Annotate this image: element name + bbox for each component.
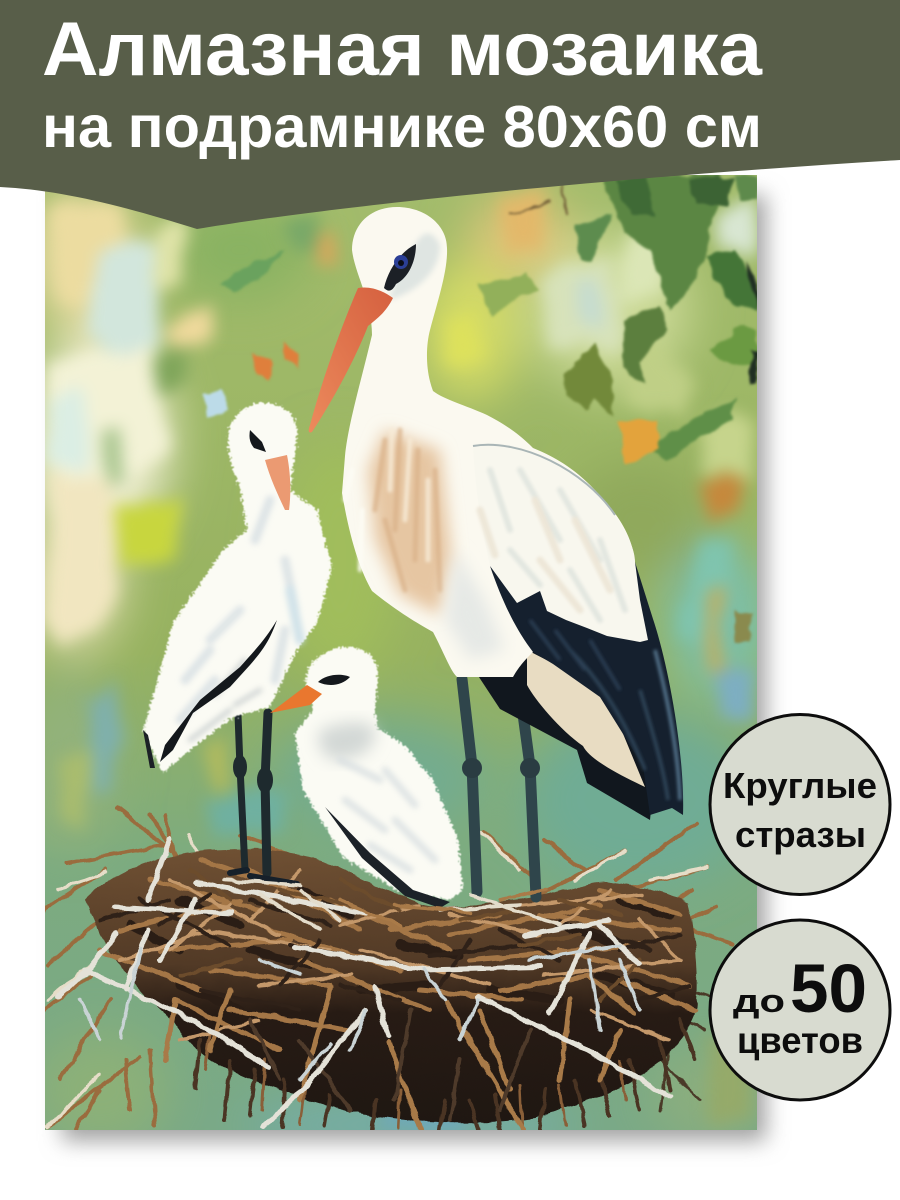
badge: up to 50 colours <box>710 920 890 1100</box>
wing shading <box>340 760 435 870</box>
canvas shadow <box>62 195 766 1141</box>
header banner <box>0 0 900 229</box>
title: Алмазная мозаика <box>42 7 763 92</box>
badge: round rhinestones: Круглые <box>723 765 877 806</box>
peach chest feathers <box>368 430 452 615</box>
white wing <box>490 544 648 642</box>
body <box>143 403 332 773</box>
eye <box>394 255 408 269</box>
under tail beige <box>527 650 645 787</box>
left chick: standing <box>143 403 332 884</box>
under tail black <box>473 650 655 820</box>
badge: up to 50 colours: 50 <box>790 950 867 1027</box>
face grey <box>390 233 440 300</box>
wing top line <box>473 445 615 515</box>
tail tip <box>143 730 155 768</box>
painting: storks in a nest <box>25 175 775 1150</box>
hanging fringe <box>195 1020 695 1130</box>
eye <box>249 430 266 452</box>
badge: round rhinestones: стразы <box>735 814 866 855</box>
top band sticks <box>100 860 695 1050</box>
legs <box>462 677 540 897</box>
badge: round rhinestones <box>710 714 890 894</box>
badge: up to 50 colours: до <box>733 983 785 1019</box>
legs <box>230 713 297 884</box>
subtitle: на подрамнике 80х60 см <box>42 94 762 160</box>
dark wing band <box>160 620 277 762</box>
chest feather strokes <box>345 430 440 590</box>
dark mottling <box>130 890 670 1010</box>
painted background <box>25 175 775 1150</box>
beak <box>270 685 322 713</box>
badge: up to 50 colours: цветов <box>737 1020 863 1061</box>
wing blue highlights <box>530 620 680 800</box>
white body and neck <box>342 207 635 677</box>
body <box>295 647 463 900</box>
nest <box>45 807 733 1130</box>
eye mask <box>384 244 416 291</box>
grey body shading <box>445 550 505 660</box>
beak <box>309 287 393 433</box>
wing feather dabs <box>480 470 625 620</box>
beak <box>265 455 290 510</box>
black wing <box>490 562 683 815</box>
lower tan and dark sticks <box>165 977 634 1130</box>
front nest sticks <box>225 880 560 930</box>
brush patches <box>48 190 752 1130</box>
wing dark edge <box>325 807 450 908</box>
back sticks <box>45 807 733 1130</box>
small chick: front <box>270 647 463 908</box>
body shading <box>180 500 300 740</box>
foliage <box>205 175 757 640</box>
neck grey shading <box>318 722 375 760</box>
eye <box>318 675 350 685</box>
large stork: adult <box>309 207 683 897</box>
pale branches <box>58 840 670 1127</box>
nest mass <box>85 849 697 1123</box>
